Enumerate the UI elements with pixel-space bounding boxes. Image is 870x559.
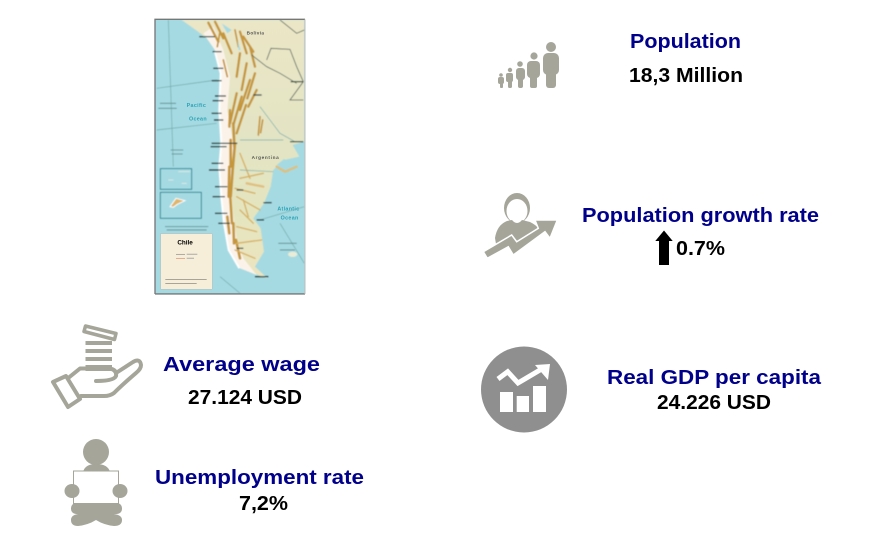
map of Chile — [155, 19, 305, 294]
heading: unemployment rate: Unemployment rate — [155, 467, 364, 489]
map frame — [155, 19, 305, 294]
icon: unemployment — [64, 439, 128, 526]
map of Chile: Argentina — [252, 155, 279, 160]
borders and rivers — [252, 20, 304, 100]
icon: population growth — [483, 193, 557, 258]
heading: population growth rate: Population growth rate — [582, 205, 819, 227]
value: population growth rate: 0.7% — [676, 238, 725, 260]
icon: population — [498, 42, 559, 88]
inset maps — [160, 169, 201, 218]
map of Chile: Bolivia — [247, 30, 264, 35]
scattered islands — [158, 103, 297, 250]
heading: average wage: Average wage — [163, 354, 320, 376]
map labels: Pacific — [187, 103, 206, 109]
map labels — [187, 103, 300, 221]
value: population: 18,3 Million — [629, 65, 743, 87]
icon: GDP chart — [481, 346, 567, 432]
neighbouring land — [182, 20, 304, 278]
Chile lowland strip — [203, 27, 257, 275]
heading: population: Population — [630, 31, 741, 53]
map labels: Atlantic — [277, 206, 300, 212]
heading: real GDP per capita: Real GDP per capita — [607, 367, 822, 389]
map of Chile: Chile — [177, 240, 193, 247]
icon: up arrow — [655, 230, 673, 265]
map labels: Ocean — [281, 215, 299, 221]
lakes and estuary — [222, 23, 295, 169]
legend box — [161, 234, 212, 289]
coastal towns — [199, 37, 303, 277]
value: unemployment rate: 7,2% — [239, 493, 288, 515]
value: real GDP per capita: 24.226 USD — [657, 392, 771, 414]
map labels: Ocean — [189, 116, 207, 122]
icon: wage — [53, 326, 141, 407]
Andes relief streaks — [208, 22, 297, 258]
value: average wage: 27.124 USD — [188, 387, 302, 409]
coastal pale edge — [215, 52, 239, 268]
